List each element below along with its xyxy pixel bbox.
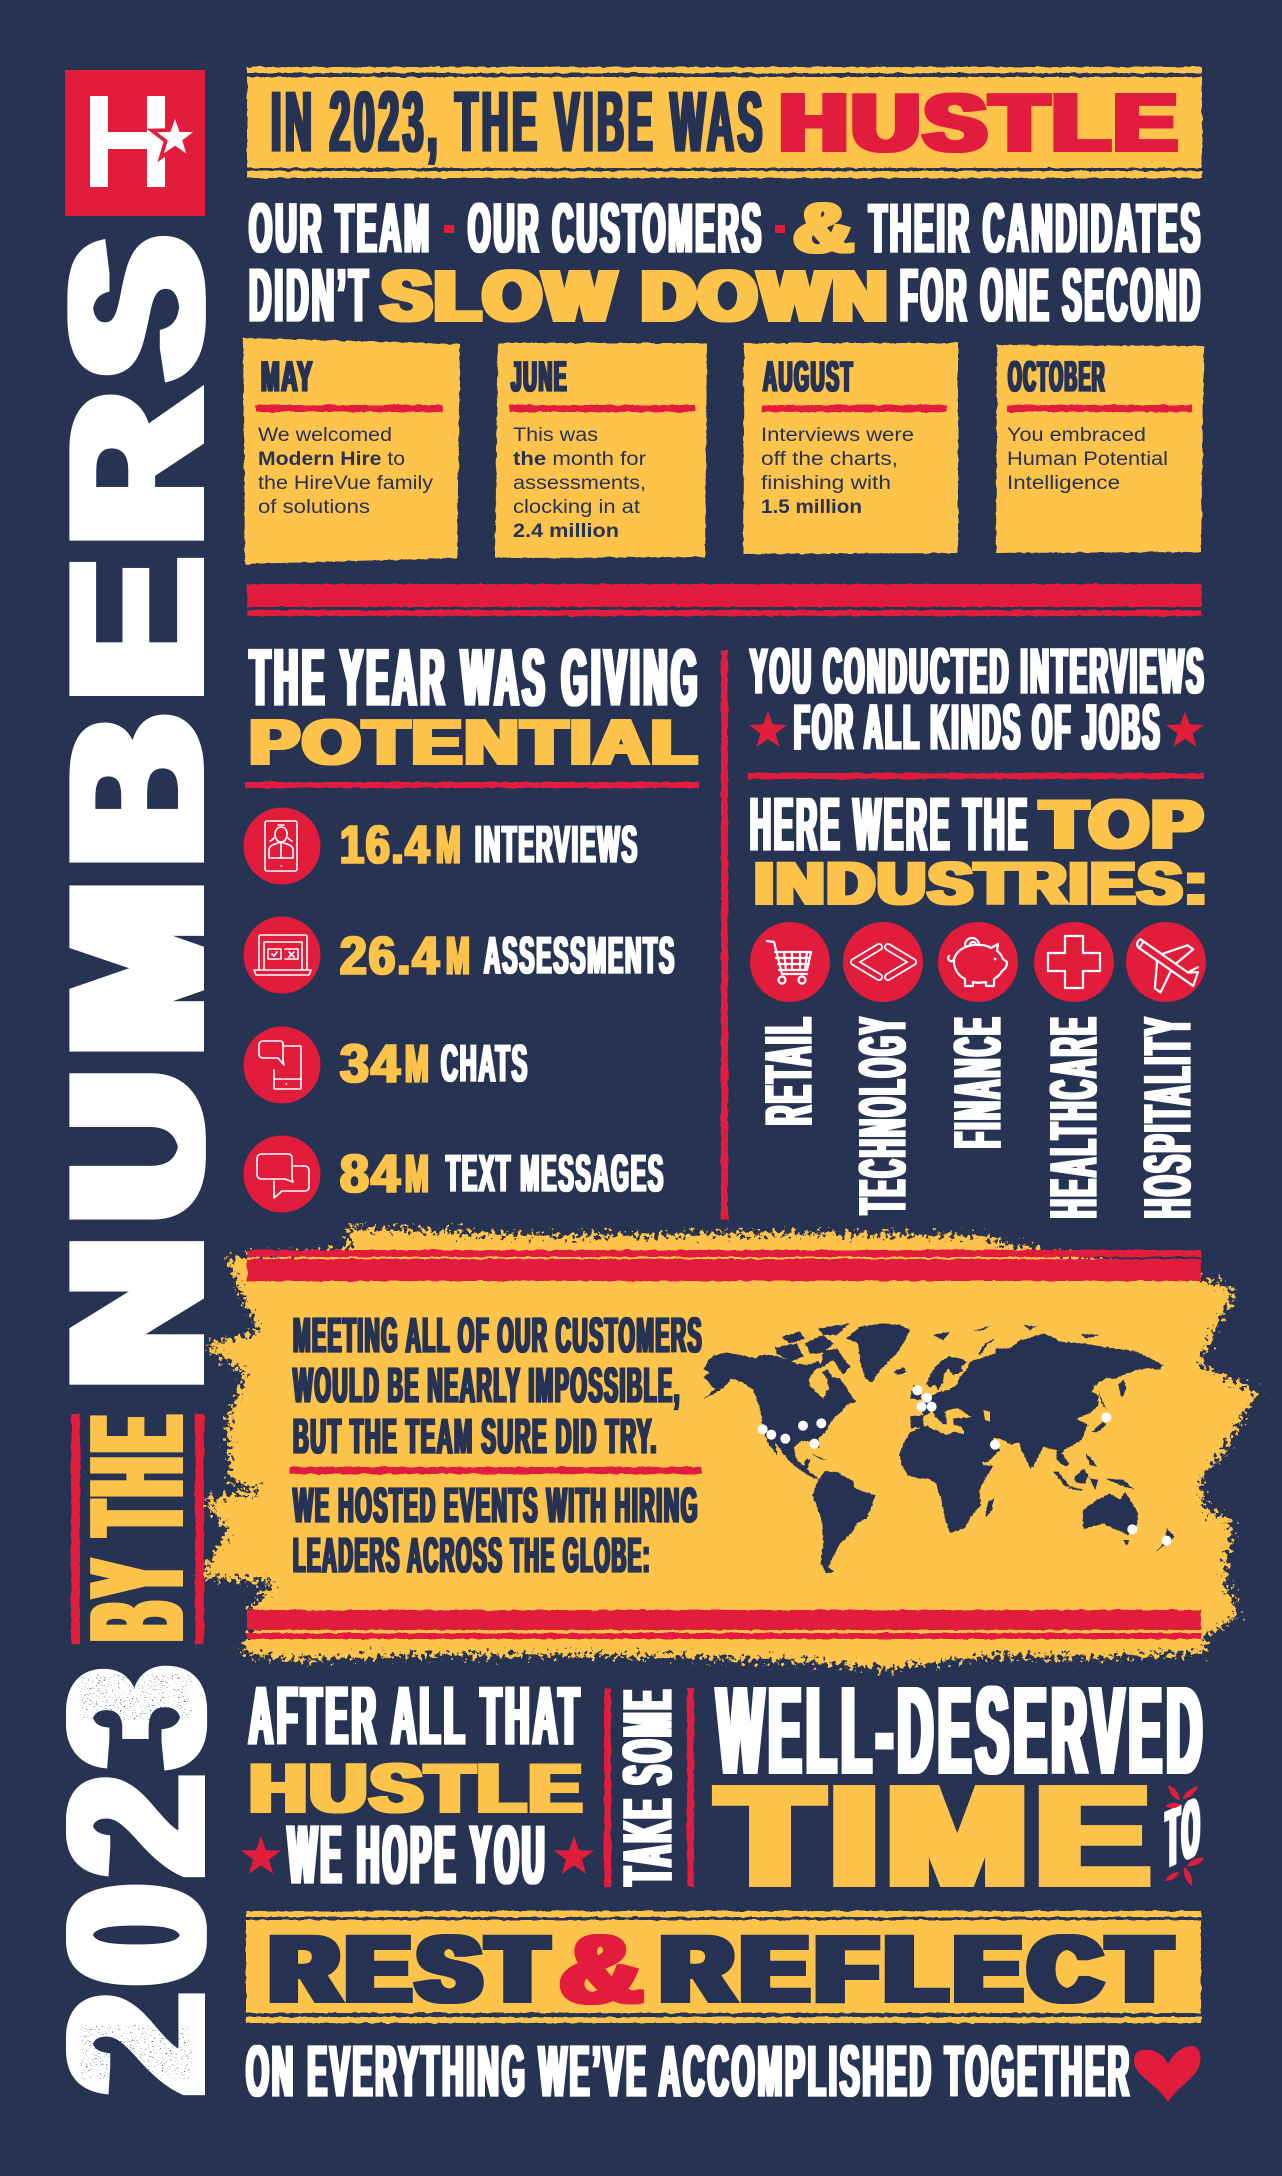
month text: Interviews were (761, 425, 914, 446)
headline line two (249, 253, 1203, 337)
month text: finishing with (761, 473, 891, 494)
month text: of solutions (258, 497, 370, 518)
side title: 2023 by the numbers: BY THE (63, 1410, 210, 1640)
logo (65, 70, 205, 216)
stat: chats: M (405, 1034, 431, 1094)
panel: october: OCTOBER (1008, 353, 1106, 401)
month heading: MAY (261, 353, 314, 401)
text: WE HOSTED EVENTS WITH HIRING (293, 1479, 699, 1533)
month text: 1.5 million (761, 497, 862, 518)
icon: piggy bank (938, 922, 1018, 1002)
stat: interviews: M (436, 815, 463, 875)
closing text: after all that hustle (241, 1669, 594, 1901)
banner highlight: hustle: HUSTLE (780, 78, 1181, 167)
side title word: numbers: NUMBERS (32, 220, 241, 1386)
icon: phone with person (244, 808, 320, 884)
banner word: reflect: REFLECT (662, 1918, 1179, 2020)
icon: laptop (244, 916, 320, 994)
month text: 2.4 million (513, 521, 619, 542)
icon: code brackets (843, 922, 923, 1002)
text: LEADERS ACROSS THE GLOBE: (293, 1529, 651, 1583)
month text: This was (513, 425, 598, 446)
industry: healthcare (1034, 922, 1114, 1218)
text block: meeting all customers (290, 1309, 703, 1474)
text: WE HOPE YOU (288, 1808, 548, 1901)
text: ASSESSMENTS (484, 927, 676, 985)
month text: You embraced (1007, 425, 1146, 446)
stat: text messages: M (405, 1144, 431, 1204)
heading: top industries (750, 782, 1210, 916)
month text: Modern Hire to (258, 449, 405, 470)
stat number: 26.4 (340, 926, 441, 986)
stat: text messages (244, 1136, 665, 1212)
stat number: 16.4 (340, 815, 431, 875)
month text (513, 425, 647, 542)
headline line two: SLOW DOWN (382, 257, 890, 335)
icon: cart (750, 922, 830, 1002)
industry: hospitality: HOSPITALITY (1130, 1015, 1204, 1218)
stat: chats (244, 1026, 529, 1104)
closing text: after all that hustle: HUSTLE (250, 1750, 585, 1826)
month text: Intelligence (1007, 473, 1120, 494)
world map with event dots (703, 1323, 1175, 1573)
icon: cross (1034, 922, 1114, 1002)
side title year: 2023: 2023 (28, 1657, 244, 2093)
heading: the year was giving potential: POTENTIAL (250, 708, 700, 778)
text: CHATS (441, 1035, 529, 1093)
month text (761, 425, 914, 518)
industry: retail: RETAIL (751, 1015, 825, 1125)
month text (258, 425, 434, 518)
industry: hospitality (1088, 884, 1244, 1218)
rotated text: take some (604, 1687, 694, 1887)
industry: healthcare: HEALTHCARE (1036, 1015, 1110, 1218)
text: TAKE SOME (609, 1687, 686, 1885)
month text: the HireVue family (258, 473, 434, 494)
headline line one: & (794, 189, 857, 267)
icon: speech bubbles (244, 1136, 320, 1212)
stat number: 84 (340, 1144, 402, 1204)
stat: assessments (244, 916, 676, 994)
text block: hosted events (293, 1479, 699, 1583)
month text (1007, 425, 1168, 494)
banner: rest and reflect (246, 1911, 1201, 2023)
panel: june (495, 343, 707, 558)
banner word: rest: REST (271, 1918, 555, 2020)
heading: the year was giving potential (245, 633, 701, 788)
icon: airplane (1088, 884, 1244, 1040)
yellow brush panel background (200, 1228, 1258, 1668)
text: WOULD BE NEARLY IMPOSSIBLE, (293, 1359, 681, 1413)
heading: well-deserved time (717, 1663, 1207, 1914)
heading: top industries: TOP (1041, 786, 1206, 862)
heading: well-deserved time: TIME (719, 1756, 1158, 1914)
red bars on brush panel (247, 1250, 1201, 1639)
industry: technology (843, 922, 923, 1214)
panel: october (996, 345, 1204, 553)
icon: phone with bubble (244, 1026, 320, 1104)
headline line two: DIDN’T (249, 253, 371, 337)
heading: you conducted interviews (748, 635, 1206, 779)
panel: august: AUGUST (763, 353, 854, 401)
side title: 2023 by the numbers (28, 220, 244, 2093)
month text: clocking in at (513, 497, 641, 518)
month text: off the charts, (761, 449, 898, 470)
panel: june: JUNE (511, 353, 568, 401)
event location dots (758, 1385, 1172, 1546)
icon: heart (1134, 2046, 1201, 2102)
month text: assessments, (513, 473, 646, 494)
stat: interviews (244, 808, 639, 884)
industry: finance: FINANCE (940, 1015, 1014, 1148)
month text: the month for (513, 449, 647, 470)
text: TEXT MESSAGES (446, 1145, 665, 1203)
headline line one: OUR CUSTOMERS (468, 189, 764, 267)
text: AFTER ALL THAT (249, 1669, 583, 1762)
month text: Human Potential (1007, 449, 1168, 470)
flourished word: to (1165, 1779, 1204, 1886)
text: INTERVIEWS (475, 816, 639, 874)
panel: may (243, 338, 460, 564)
headline line one: OUR TEAM (249, 189, 432, 267)
industry: finance (938, 922, 1018, 1148)
heading: top industries: INDUSTRIES: (755, 852, 1210, 916)
banner ampersand: & (560, 1916, 648, 2023)
side title word: by the (63, 1410, 210, 1644)
industry: technology: TECHNOLOGY (845, 1015, 919, 1214)
stat number: 34 (340, 1034, 402, 1094)
month text: We welcomed (258, 425, 392, 446)
text block: meeting all customers: BUT THE TEAM SURE DID TRY. (293, 1410, 658, 1464)
text: MEETING ALL OF OUR CUSTOMERS (293, 1309, 703, 1363)
panel: august (743, 343, 958, 554)
stat: assessments: M (446, 926, 472, 986)
